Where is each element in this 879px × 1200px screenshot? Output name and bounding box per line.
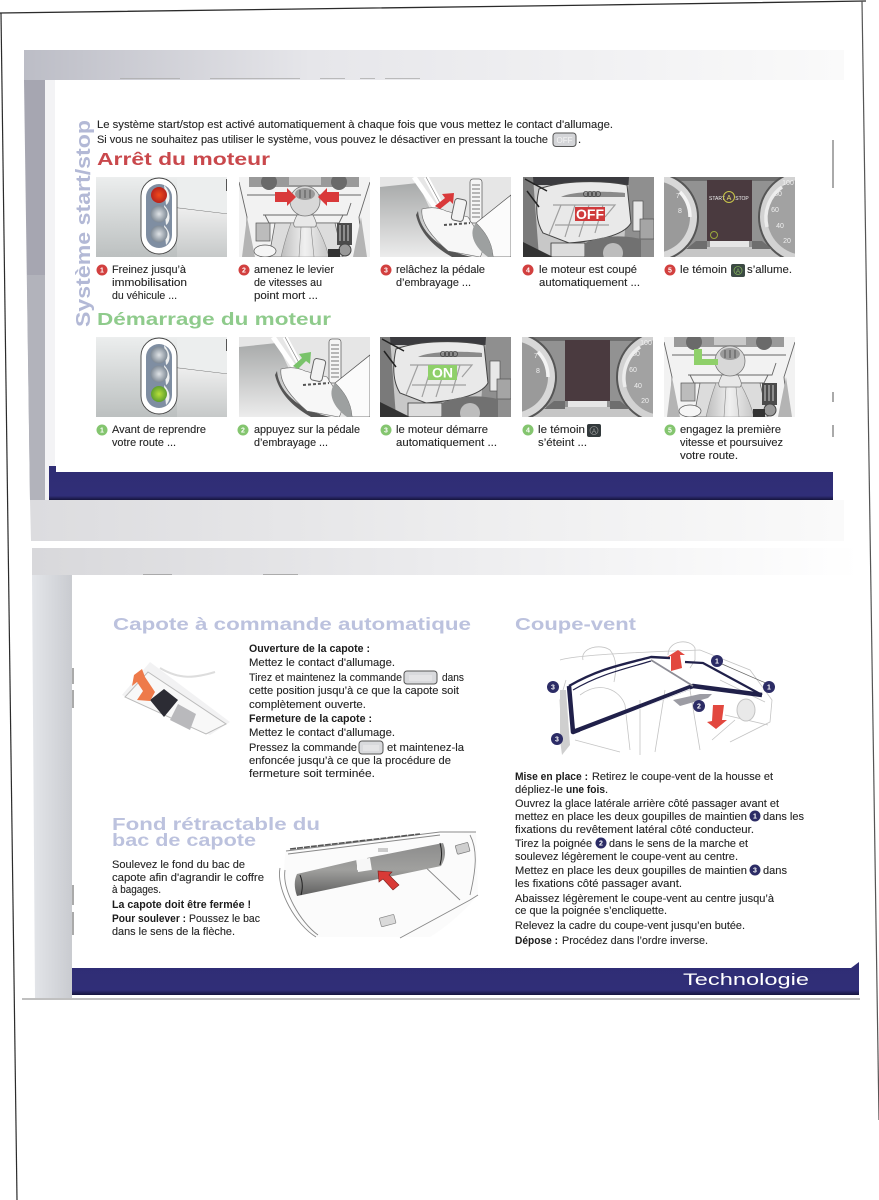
text: capote instructions: et maintenez-la bbox=[387, 742, 465, 754]
text: coupe-vent instructions: dans le sens de la marche et bbox=[609, 838, 748, 850]
step 1 bbox=[96, 264, 187, 302]
step image: gear lever to neutral bbox=[239, 174, 370, 257]
step 5: s’allume. bbox=[747, 264, 792, 276]
footer bar: bottom spread with section label bbox=[72, 962, 859, 995]
step 3: 3 bbox=[384, 428, 388, 434]
text: capote instructions: Tirez et maintenez la commande bbox=[249, 672, 402, 684]
step image: engine OFF bbox=[523, 177, 654, 263]
step 2: 2 bbox=[242, 268, 246, 274]
text: capote instructions: Ouverture de la capote : bbox=[249, 643, 370, 655]
text: capote instructions: Mettez le contact d'allumage. bbox=[249, 727, 395, 739]
step 3: le moteur démarre bbox=[396, 424, 488, 436]
step 3: relâchez la pédale bbox=[396, 264, 485, 276]
step 2: appuyez sur la pédale bbox=[254, 424, 360, 436]
text: coupe-vent instructions: Mise en place : bbox=[515, 771, 588, 783]
text: coupe-vent instructions: 3 bbox=[753, 868, 757, 874]
step 3 bbox=[380, 424, 497, 449]
step 1: Avant de reprendre bbox=[112, 424, 206, 436]
intro text: Le système start/stop est activé automatiquement à chaque fois que vous mettez le contact d'allumage. bbox=[97, 119, 613, 131]
text: coupe-vent instructions: mettez en place les deux goupilles de maintien bbox=[515, 811, 747, 823]
step 2: d’embrayage ... bbox=[254, 437, 328, 449]
step 5: 5 bbox=[668, 268, 672, 274]
step 3: automatiquement ... bbox=[396, 437, 497, 449]
text: capote instructions: enfoncée jusqu’à ce que la procédure de bbox=[249, 755, 451, 767]
illustration: wind deflector bbox=[547, 642, 775, 755]
text: fond instructions: dans le sens de la flèche. bbox=[112, 926, 235, 938]
number markers: 3 bbox=[551, 684, 555, 692]
step 2: point mort ... bbox=[254, 290, 318, 302]
text: fond instructions: à bagages. bbox=[112, 884, 161, 896]
arrow: red up bbox=[667, 650, 685, 671]
step image: red traffic light bbox=[96, 177, 227, 257]
text: coupe-vent instructions: fixations du revêtement latéral côté conducteur. bbox=[515, 824, 754, 836]
icon: roof key bbox=[404, 671, 437, 684]
heading: Démarrage du moteur: Démarrage du moteur bbox=[97, 309, 331, 329]
step 5: le témoin bbox=[680, 264, 727, 276]
text: capote instructions: cette position jusqu’à ce que la capote soit bbox=[249, 685, 459, 697]
step 5: votre route. bbox=[680, 450, 738, 462]
icon: OFF key: OFF bbox=[556, 136, 573, 145]
step image: green traffic light bbox=[96, 337, 227, 417]
step image: press clutch pedal bbox=[239, 337, 370, 417]
step 4: le témoin bbox=[538, 424, 585, 436]
heading: Arrêt du moteur: Arrêt du moteur bbox=[97, 149, 270, 169]
step image: instrument cluster with lamp on: START bbox=[709, 196, 725, 202]
step image: engine ON: ON bbox=[432, 364, 453, 380]
text: coupe-vent instructions: Relevez la cadre du coupe-vent jusqu’en butée. bbox=[515, 920, 745, 932]
vertical side title: Système start/stop bbox=[73, 120, 95, 327]
step 1: 1 bbox=[100, 268, 104, 274]
step 5 bbox=[664, 264, 792, 277]
captions: engine stop bbox=[96, 264, 792, 302]
text: fond instructions bbox=[112, 859, 264, 938]
text: capote instructions: complètement ouverte. bbox=[249, 699, 366, 711]
number markers: 2 bbox=[697, 704, 701, 710]
footer bar: top spread bbox=[49, 466, 833, 500]
text: coupe-vent instructions: Procédez dans l’ordre inverse. bbox=[562, 935, 708, 947]
text: fond instructions: Soulevez le fond du bac de bbox=[112, 859, 245, 871]
intro text: Si vous ne souhaitez pas utiliser le système, vous pouvez le désactiver en pressant la touche bbox=[97, 134, 548, 146]
heading: Capote à commande automatique: Capote à commande automatique bbox=[113, 614, 471, 634]
step image: instrument cluster with lamp on: STOP bbox=[735, 196, 749, 202]
arrow: red bbox=[378, 871, 399, 890]
text: capote instructions: fermeture soit terminée. bbox=[249, 768, 375, 780]
text: coupe-vent instructions: dans bbox=[763, 865, 787, 877]
text: coupe-vent instructions: dépliez-le bbox=[515, 784, 563, 796]
step 2 bbox=[238, 264, 334, 302]
step 5: vitesse et poursuivez bbox=[680, 437, 783, 449]
text: coupe-vent instructions: Mettez en place les deux goupilles de maintien bbox=[515, 865, 747, 877]
step 2: amenez le levier bbox=[254, 264, 334, 276]
illustration: trunk with roof tray bbox=[279, 832, 478, 938]
icon: OFF key bbox=[553, 133, 576, 146]
arrow: red down bbox=[707, 705, 727, 729]
illustration: roof switch bbox=[122, 662, 230, 735]
step image: engage first gear bbox=[664, 334, 795, 417]
heading: Coupe-vent: Coupe-vent bbox=[515, 614, 636, 634]
arrow: orange curved bbox=[132, 669, 155, 701]
text: coupe-vent instructions: soulevez légèrement le coupe-vent au centre. bbox=[515, 851, 738, 863]
step image: instrument cluster with lamp on: A bbox=[727, 195, 732, 202]
step 5: 5 bbox=[668, 428, 672, 434]
step image: instrument cluster with lamp on bbox=[664, 177, 795, 257]
step 4 bbox=[522, 264, 640, 289]
step 3 bbox=[380, 264, 485, 289]
step 1: Freinez jusqu’à bbox=[112, 264, 187, 276]
step 1: immobilisation bbox=[112, 277, 187, 289]
text: coupe-vent instructions: Abaissez légèrement le coupe-vent au centre jusqu’à bbox=[515, 893, 775, 905]
step image: engine OFF: OFF bbox=[576, 206, 604, 222]
step 1: du véhicule ... bbox=[112, 290, 177, 302]
step 5: A bbox=[736, 269, 740, 275]
icon: roof key closing bbox=[359, 741, 383, 754]
text: coupe-vent instructions: ce que la poignée s’encliquette. bbox=[515, 905, 667, 917]
text: coupe-vent instructions: une fois bbox=[566, 784, 605, 796]
text: fond instructions: capote afin d'agrandir le coffre bbox=[112, 872, 264, 884]
heading: Fond rétractable du bac de capote bbox=[112, 814, 320, 850]
step image: engine ON bbox=[380, 337, 511, 423]
deflector frame bbox=[569, 657, 762, 732]
scanned page background: bottom spread bbox=[22, 548, 860, 999]
text: coupe-vent instructions: Dépose : bbox=[515, 935, 558, 947]
number markers: 3 bbox=[555, 736, 559, 744]
text: coupe-vent instructions: les fixations côté passager avant. bbox=[515, 878, 682, 890]
text: capote instructions: dans bbox=[442, 672, 464, 684]
text: coupe-vent instructions: Retirez le coupe-vent de la housse et bbox=[592, 771, 773, 783]
text: coupe-vent instructions bbox=[515, 771, 804, 947]
step 1 bbox=[96, 424, 206, 449]
number markers: 1 bbox=[715, 658, 719, 666]
heading: Fond rétractable du bac de capote: bac de capote bbox=[112, 830, 256, 850]
step 4: 4 bbox=[526, 428, 530, 434]
text: coupe-vent instructions: dans les bbox=[763, 811, 804, 823]
text: fond instructions: La capote doit être fermée ! bbox=[112, 899, 251, 911]
text: capote instructions: Fermeture de la capote : bbox=[249, 713, 372, 725]
step image: release clutch pedal bbox=[380, 177, 511, 257]
number markers: 1 bbox=[767, 684, 771, 692]
text: capote instructions: Mettez le contact d'allumage. bbox=[249, 657, 395, 669]
step 5: engagez la première bbox=[680, 424, 781, 436]
captions: engine start bbox=[96, 424, 783, 462]
intro text: . bbox=[578, 134, 581, 146]
footer bar: bottom spread with section label: Technologie bbox=[683, 970, 809, 989]
step 1: votre route ... bbox=[112, 437, 176, 449]
text: coupe-vent instructions: Tirez la poignée bbox=[515, 838, 592, 850]
text: fond instructions: Pour soulever : bbox=[112, 913, 186, 925]
step 1: 1 bbox=[100, 428, 104, 434]
text: coupe-vent instructions: 1 bbox=[753, 814, 757, 820]
text: capote instructions bbox=[249, 643, 465, 780]
text: coupe-vent instructions: 2 bbox=[599, 840, 603, 848]
text: coupe-vent instructions: . bbox=[605, 784, 608, 796]
step 3: 3 bbox=[384, 268, 388, 274]
intro text bbox=[97, 119, 613, 146]
step 4: 4 bbox=[526, 268, 530, 274]
step 4: s’éteint ... bbox=[538, 437, 587, 449]
step 2: 2 bbox=[241, 428, 245, 434]
heading: Fond rétractable du bac de capote: Fond rétractable du bbox=[112, 814, 320, 834]
text: coupe-vent instructions: Ouvrez la glace latérale arrière côté passager avant et bbox=[515, 798, 779, 810]
step 4 bbox=[522, 424, 601, 449]
text: fond instructions: Poussez le bac bbox=[189, 913, 260, 925]
number markers bbox=[547, 655, 775, 745]
step 4: A bbox=[592, 429, 596, 435]
step 2 bbox=[238, 424, 360, 449]
step 2: de vitesses au bbox=[254, 277, 322, 289]
text: capote instructions: Pressez la commande bbox=[249, 742, 357, 754]
step image: instrument cluster lamp off bbox=[522, 337, 653, 417]
step 5 bbox=[664, 424, 783, 462]
step 3: d’embrayage ... bbox=[396, 277, 471, 289]
step 4: automatiquement ... bbox=[539, 277, 640, 289]
scanned page background: top spread bbox=[24, 50, 844, 541]
step 4: le moteur est coupé bbox=[539, 264, 637, 276]
